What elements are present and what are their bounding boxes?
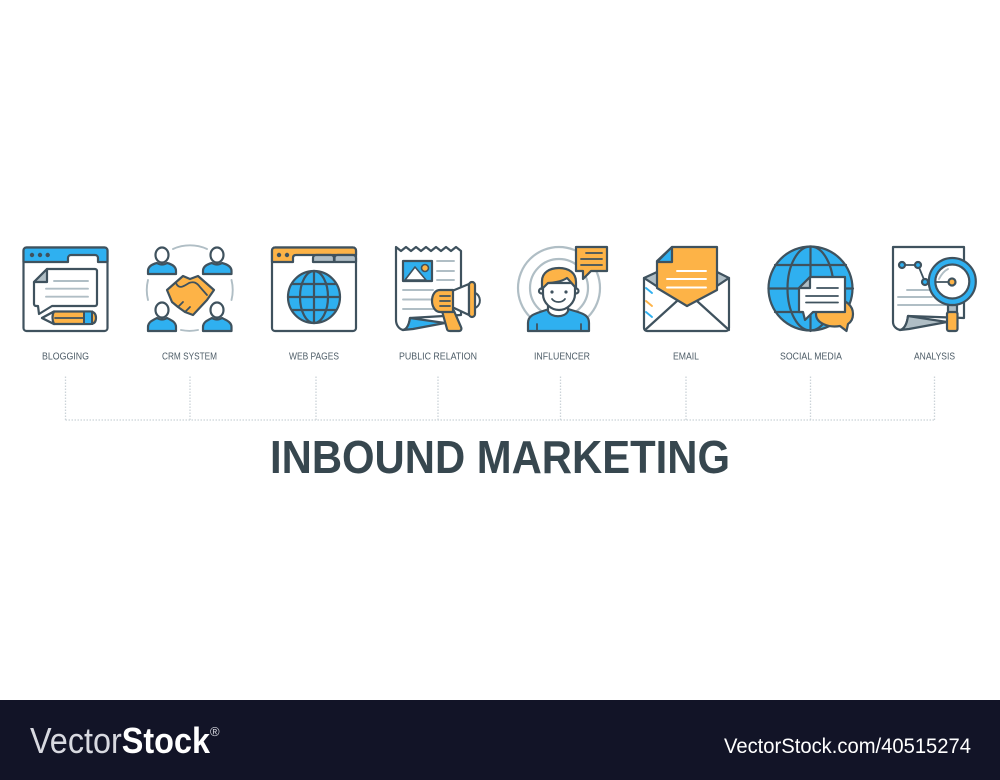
- icon: web pages: [272, 248, 356, 331]
- footer logo: VectorStock: [30, 720, 211, 761]
- label: blogging: BLOGGING: [42, 352, 89, 362]
- label: analysis: ANALYSIS: [914, 352, 955, 362]
- footer logo registered mark: ®: [210, 724, 220, 739]
- footer bar: [0, 700, 1000, 780]
- label: influencer: INFLUENCER: [534, 352, 590, 362]
- label: email: EMAIL: [673, 352, 699, 362]
- label: crm system: CRM SYSTEM: [162, 352, 217, 362]
- icon: email: [644, 247, 729, 331]
- icon: public relation: [396, 247, 480, 331]
- label: public relation: PUBLIC RELATION: [399, 352, 477, 362]
- icon: social media: [768, 246, 853, 331]
- icon: blogging: [24, 248, 108, 331]
- footer image id: VectorStock.com/40515274: [724, 735, 971, 758]
- label: web pages: WEB PAGES: [289, 352, 339, 362]
- icon: crm system: [147, 245, 233, 331]
- label: social media: SOCIAL MEDIA: [780, 352, 842, 362]
- icon: analysis: [893, 247, 976, 331]
- icon: influencer: [518, 247, 607, 331]
- dotted connector bracket: [66, 376, 934, 420]
- title: INBOUND MARKETING: [270, 431, 730, 483]
